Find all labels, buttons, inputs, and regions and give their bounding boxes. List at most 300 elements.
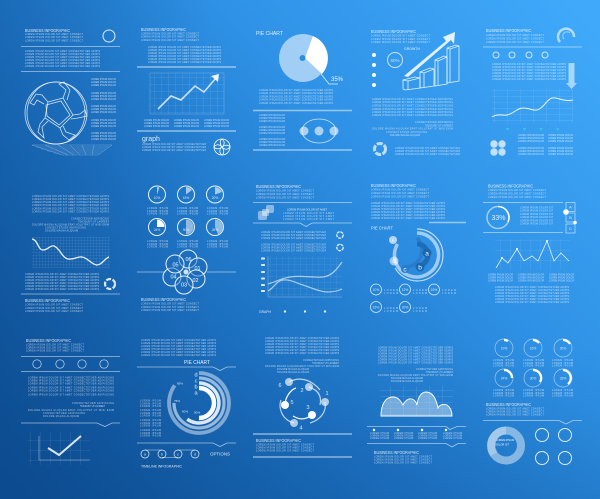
side notes: LOREM IPSUM DOLOR xyxy=(91,99,116,101)
side notes: LOREM IPSUM xyxy=(140,423,161,425)
ring row xyxy=(33,360,108,368)
chart captions: LOREM IPSUM DOLOR xyxy=(488,280,513,282)
body text: LOREM IPSUM DOLOR SIT AMET CONSECTETUER ADIPIS xyxy=(141,354,216,357)
intro text: LOREM IPSUM DOLOR SIT AMET CONSECT xyxy=(488,196,547,199)
body text: TINCIDUNT UT LAOREET xyxy=(312,362,340,365)
body text: LOREM IPSUM DOLOR SIT AMET CONSECTETUER ADIPIS xyxy=(492,72,566,75)
label: growth: GROWTH xyxy=(404,47,421,51)
body text: CONSECTETUER ADIPISCING xyxy=(72,402,114,405)
footer text: LOREM IPSUM DOLOR SIT AMET CONSECT xyxy=(25,310,84,313)
captions: LOREM IPSUM DOLOR xyxy=(518,154,544,156)
body text: LOREM IPSUM DOLOR SIT AMET CONSECTETUER ADIPIS xyxy=(492,66,566,69)
icon: segmented globe xyxy=(25,82,87,144)
body text: LOREM IPSUM DOLOR SIT AMET CONSECTETUER ADIPIS xyxy=(25,50,100,53)
caption columns xyxy=(144,120,229,128)
body text: LOREM IPSUM DOLOR SIT AMET CONSECTETUER xyxy=(261,231,326,234)
side notes: LOREM IPSUM xyxy=(140,430,161,432)
caption columns: LOREM IPSUM DOLOR xyxy=(204,126,229,128)
body text: LOREM IPSUM DOLOR SIT AMET CONSECTETUER ADIPIS xyxy=(371,205,445,208)
timeline captions: LOREM IPSUM xyxy=(370,438,389,440)
gauge captions: LOREM IPSUM xyxy=(523,390,544,392)
icon: clover xyxy=(490,140,506,156)
gauge captions: LOREM xyxy=(384,293,398,295)
petal diagram: 06 xyxy=(185,257,192,263)
side notes: LOREM IPSUM DOLOR xyxy=(91,106,116,108)
lower text: LOREM IPSUM DOLOR SIT AMET CONSECTETUER ADIPIS xyxy=(25,288,99,291)
gauge captions: LOREM IPSUM xyxy=(493,390,514,392)
body text: LOREM IPSUM DOLOR SIT AMET CONSECTETUER xyxy=(261,237,326,240)
body text: LOREM IPSUM DOLOR SIT AMET CONSECTETUER ADIPIS xyxy=(378,356,453,358)
heading: pie chart: PIE CHART xyxy=(184,360,211,366)
panel: swirl cycle xyxy=(253,337,352,457)
intro text: LOREM IPSUM DOLOR SIT AMET CONSECT xyxy=(141,32,200,36)
swirl diagram: 4 xyxy=(299,426,303,432)
footnote text xyxy=(395,147,460,156)
panel: pie chart 35% xyxy=(253,31,352,150)
intro text: LOREM IPSUM DOLOR SIT AMET CONSECT xyxy=(26,344,85,346)
body text: LOREM IPSUM DOLOR SIT AMET CONSECTETUER ADIPIS xyxy=(495,292,569,295)
side notes: LOREM IPSUM DOLOR xyxy=(259,133,285,135)
chart captions: LOREM IPSUM DOLOR xyxy=(549,280,574,282)
radial chart: c xyxy=(403,266,407,274)
body text: LOREM IPSUM DOLOR SIT AMET CONSECTETUER ADIPIS xyxy=(492,69,566,72)
pie row 1: 15% xyxy=(183,196,189,200)
body text xyxy=(372,98,454,137)
graph text: LOREM IPSUM DOLOR SIT AMET CONSECTETUER xyxy=(142,149,206,152)
curve chart xyxy=(261,256,342,297)
lower text: LOREM IPSUM DOLOR SIT AMET CONSECTETUER ADIPIS xyxy=(25,282,99,285)
body text: LOREM IPSUM DOLOR SIT AMET CONSECTETUER ADIPIS xyxy=(32,195,109,198)
petal diagram: 03 xyxy=(181,282,187,288)
intro text: LOREM IPSUM DOLOR SIT AMET CONSECT xyxy=(486,34,545,37)
gauge captions: LOREM IPSUM xyxy=(523,363,544,365)
mini gauges: 20% xyxy=(402,306,408,310)
body text: LOREM IPSUM DOLOR SIT AMET CONSECTETUER ADIPIS xyxy=(32,210,109,214)
footnote text: LOREM IPSUM DOLOR SIT AMET CONSECTETUER xyxy=(395,153,460,156)
icon: dashed ring xyxy=(105,279,115,289)
heading: BUSINESS INFOGRAPHIC xyxy=(371,183,416,188)
body text: LOREM IPSUM DOLOR SIT AMET CONSECTETUER ADIPIS xyxy=(148,46,221,49)
caption columns: LOREM IPSUM DOLOR xyxy=(174,126,199,128)
panel: radial pie chart xyxy=(370,183,466,313)
pie captions: LOREM IPSUM xyxy=(207,244,228,246)
radial chart: d xyxy=(392,258,396,265)
pie captions: LOREM IPSUM xyxy=(177,241,198,243)
pie captions: LOREM IPSUM xyxy=(147,211,168,213)
body text: LOREM IPSUM DOLOR SIT AMET CONSECTETUER ADIPIS xyxy=(495,298,569,301)
intro text: LOREM IPSUM DOLOR SIT AMET CONSECT xyxy=(486,414,545,416)
callout heading: LOREM IPSUM DOLOR SIT AMET xyxy=(287,208,327,212)
body text: LOREM IPSUM DOLOR SIT AMET CONSECTETUER ADIPISCING xyxy=(28,390,114,392)
intro text: LOREM IPSUM DOLOR SIT AMET CONSECT xyxy=(256,193,315,196)
gauge: 33%: 33% xyxy=(491,215,506,222)
pie captions: LOREM IPSUM xyxy=(177,208,198,210)
intro text: LOREM IPSUM DOLOR SIT AMET CONSECT xyxy=(371,41,431,44)
pie captions: LOREM IPSUM xyxy=(147,208,168,210)
body text xyxy=(259,89,333,105)
line chart with arrow xyxy=(150,73,224,114)
dashed ring icons xyxy=(337,232,343,251)
intro text xyxy=(26,344,85,352)
body text xyxy=(28,376,114,418)
petal diagram: 05 xyxy=(172,262,179,268)
body text xyxy=(148,46,221,64)
pie row 1 xyxy=(148,186,224,203)
side notes: LOREM IPSUM DOLOR xyxy=(91,82,116,84)
pie chart xyxy=(279,34,328,82)
radial chart: a xyxy=(425,250,429,258)
intro text: LOREM IPSUM DOLOR SIT AMET CONSECT xyxy=(256,196,315,200)
panel: check mark chart xyxy=(21,338,120,465)
gauge captions: LOREM IPSUM xyxy=(552,360,573,362)
intro text: LOREM IPSUM DOLOR SIT AMET CONSECT xyxy=(486,38,545,40)
side notes: LOREM IPSUM xyxy=(140,416,161,418)
gauge captions: LOREM xyxy=(384,308,398,310)
body text: LOREM IPSUM DOLOR SIT AMET CONSECTETUER ADIPIS xyxy=(148,55,221,58)
pie row 2: 50% xyxy=(183,228,189,232)
timeline xyxy=(141,450,199,458)
body text: LOREM IPSUM DOLOR SIT AMET CONSECTETUER ADIPIS xyxy=(371,202,445,205)
footer text: LOREM IPSUM DOLOR SIT AMET CONSECT xyxy=(256,446,315,450)
heading: BUSINESS INFOGRAPHIC xyxy=(486,402,531,407)
side notes: LOREM IPSUM xyxy=(140,400,161,402)
gauge captions: LOREM IPSUM xyxy=(523,366,544,368)
side notes: LOREM IPSUM DOLOR xyxy=(259,118,285,120)
timeline captions: LOREM IPSUM xyxy=(394,438,413,440)
body text: CONSECTETUER ADIPISCING xyxy=(303,359,339,362)
timeline: b xyxy=(161,452,163,456)
caption columns: LOREM IPSUM DOLOR xyxy=(144,120,169,122)
pie captions: LOREM IPSUM xyxy=(207,214,228,216)
side notes xyxy=(140,400,161,438)
body text xyxy=(492,63,566,81)
timeline captions: LOREM IPSUM xyxy=(443,436,462,438)
body text xyxy=(25,50,100,68)
swirl diagram xyxy=(278,378,329,432)
gauge text: LOREM IPSUM DOLOR SIT xyxy=(520,224,554,226)
concentric ring chart xyxy=(169,372,229,433)
body text: LOREM IPSUM DOLOR SIT AMET CONSECTETUER ADIPIS xyxy=(25,53,100,56)
check chart xyxy=(28,432,90,465)
graph text: LOREM IPSUM DOLOR SIT AMET CONSECTETUER xyxy=(142,143,206,146)
icon: ring xyxy=(103,30,115,42)
footer text: LOREM IPSUM DOLOR SIT AMET CONSECT xyxy=(374,456,433,458)
concentric ring chart: a xyxy=(194,390,198,396)
side notes: LOREM IPSUM DOLOR xyxy=(91,139,116,141)
body text: DOLORE MAGNA ALIQUAM ERAT VOLUTPAT UT WISI ENIM xyxy=(378,374,453,377)
body text: LOREM IPSUM DOLOR SIT AMET CONSECTETUER ADIPISCING xyxy=(372,101,453,104)
body text: CONSECTETUER ADIPISCING xyxy=(45,226,86,230)
callout text xyxy=(283,212,335,221)
gauge text: LOREM IPSUM DOLOR SIT xyxy=(520,210,554,212)
callout: 35%: 35% xyxy=(331,77,344,83)
pie captions: LOREM IPSUM xyxy=(177,214,198,216)
icon: gauge xyxy=(558,29,574,42)
intro text: LOREM IPSUM DOLOR SIT AMET CONSECT xyxy=(371,34,431,38)
body text: DOLORE MAGNA ALIQUAM xyxy=(277,368,309,371)
small ring icons xyxy=(493,52,548,58)
pie captions: LOREM IPSUM xyxy=(147,214,168,216)
body text: CONSECTETUER ADIPISCING xyxy=(71,218,109,220)
mini gauges: 16% xyxy=(373,306,379,310)
icon: linked circles xyxy=(300,119,338,143)
body text: LOREM IPSUM DOLOR SIT AMET CONSECTETUER ADIPIS xyxy=(259,98,333,102)
chart captions: LOREM IPSUM DOLOR xyxy=(518,280,544,282)
body text: LOREM IPSUM DOLOR SIT AMET CONSECTETUER ADIPIS xyxy=(148,52,221,55)
body text: LOREM IPSUM DOLOR SIT AMET CONSECTETUER ADIPIS xyxy=(148,61,221,64)
chart captions: LOREM IPSUM DOLOR xyxy=(549,274,574,276)
donut chart xyxy=(491,430,521,460)
icon: rounded squares xyxy=(258,205,274,220)
timeline: c xyxy=(177,452,179,456)
chart captions: LOREM IPSUM DOLOR xyxy=(549,278,574,280)
timeline dots xyxy=(373,429,447,431)
body text xyxy=(265,337,340,374)
gauge captions: LOREM IPSUM xyxy=(523,360,544,362)
gauge grid: 10% xyxy=(501,346,507,350)
side notes: LOREM IPSUM DOLOR xyxy=(91,93,116,95)
gauge captions: LOREM xyxy=(413,308,427,310)
gauge text: LOREM IPSUM DOLOR SIT xyxy=(520,220,554,222)
body text: LOREM IPSUM DOLOR SIT AMET CONSECTETUER ADIPIS xyxy=(141,348,216,351)
footer text: LOREM IPSUM DOLOR SIT AMET CONSECT xyxy=(141,309,200,312)
body text: TINCIDUNT UT LAOREET xyxy=(425,124,454,128)
body text: LOREM IPSUM DOLOR SIT AMET CONSECTETUER ADIPISCING xyxy=(28,386,114,390)
gauge captions: LOREM IPSUM xyxy=(552,393,573,395)
pie captions: LOREM IPSUM xyxy=(147,244,168,246)
caption columns: LOREM IPSUM DOLOR xyxy=(174,120,199,122)
side notes: LOREM IPSUM DOLOR xyxy=(91,120,116,122)
radial chart xyxy=(389,229,443,281)
body text: TINCIDUNT UT LAOREET xyxy=(80,405,106,408)
gauge captions: LOREM IPSUM xyxy=(493,396,514,398)
intro text xyxy=(488,189,547,199)
body text: LOREM IPSUM DOLOR SIT AMET CONSECTETUER ADIPIS xyxy=(495,289,569,292)
body text xyxy=(261,231,326,252)
side notes: LOREM IPSUM DOLOR xyxy=(91,79,116,81)
panel: growth line graph xyxy=(137,27,236,155)
footer text: LOREM IPSUM DOLOR SIT AMET CONSECT xyxy=(25,307,84,310)
panel: wave chart top right xyxy=(483,28,582,156)
body text: DOLORE MAGNA ALIQUAM ERAT VOLUTPAT UT WISI ENIM xyxy=(32,224,109,226)
timeline captions: LOREM IPSUM xyxy=(418,438,437,440)
body text: LOREM IPSUM DOLOR SIT AMET CONSECTETUER ADIPIS xyxy=(141,351,216,354)
captions: LOREM IPSUM DOLOR xyxy=(518,138,544,140)
body text: LOREM IPSUM DOLOR SIT AMET CONSECTETUER ADIPIS xyxy=(259,96,333,98)
gauge captions: LOREM IPSUM xyxy=(552,396,573,398)
body text: LOREM IPSUM DOLOR SIT AMET CONSECTETUER ADIPIS xyxy=(495,286,569,289)
side notes: LOREM IPSUM xyxy=(140,413,161,415)
gauge captions: LOREM IPSUM xyxy=(523,396,544,398)
caption columns: LOREM IPSUM DOLOR xyxy=(204,120,229,122)
body text: DOLORE MAGNA ALIQUAM xyxy=(45,230,78,232)
side notes: LOREM IPSUM DOLOR xyxy=(91,109,116,111)
captions: LOREM IPSUM DOLOR xyxy=(548,138,573,140)
intro text xyxy=(371,34,431,44)
concentric ring chart: 75% xyxy=(174,399,180,403)
body text: DOLORE MAGNA ALIQUAM ERAT VOLUTPAT UT WISI ENIM xyxy=(28,409,114,412)
concentric ring chart: 60% xyxy=(182,410,188,414)
mini gauges xyxy=(370,284,440,312)
intro text: LOREM IPSUM DOLOR SIT AMET CONSECT xyxy=(371,192,430,195)
captions: LOREM IPSUM DOLOR xyxy=(548,151,573,153)
timeline captions: LOREM IPSUM xyxy=(394,436,413,438)
body text: LOREM IPSUM DOLOR SIT AMET CONSECTETUER ADIPIS xyxy=(259,102,333,105)
timeline captions: LOREM IPSUM xyxy=(370,433,389,435)
side notes: LOREM IPSUM DOLOR xyxy=(91,85,116,87)
gauge captions: LOREM xyxy=(384,290,398,292)
gauge captions: LOREM IPSUM xyxy=(493,363,514,365)
heading: BUSINESS INFOGRAPHIC xyxy=(486,28,531,33)
heading: BUSINESS INFOGRAPHIC xyxy=(256,438,301,443)
body text xyxy=(378,346,454,383)
gauge captions: LOREM xyxy=(442,293,456,295)
mini gauges: 15% xyxy=(431,288,437,292)
body text: LOREM IPSUM DOLOR SIT AMET CONSECTETUER ADIPIS xyxy=(371,211,445,214)
side notes: LOREM IPSUM xyxy=(140,426,161,428)
body text: LOREM IPSUM DOLOR SIT AMET CONSECTETUER ADIPISCING xyxy=(372,98,453,101)
panel: growth bars xyxy=(371,29,460,156)
lower text: LOREM IPSUM DOLOR SIT AMET CONSECTETUER ADIPIS xyxy=(25,276,99,279)
side notes: LOREM IPSUM DOLOR xyxy=(91,123,116,125)
callout text: LOREM IPSUM DOLOR SIT AMET xyxy=(283,218,335,221)
footnote text: LOREM IPSUM DOLOR SIT AMET CONSECTETUER xyxy=(395,150,460,153)
body text: DOLORE MAGNA ALIQUAM xyxy=(391,377,423,380)
side notes: LOREM IPSUM DOLOR xyxy=(259,115,285,117)
body text: LOREM IPSUM DOLOR SIT AMET CONSECTETUER ADIPIS xyxy=(141,342,216,345)
lower text xyxy=(25,273,99,291)
heading: graph: graph xyxy=(142,136,160,143)
intro text: LOREM IPSUM DOLOR SIT AMET CONSECT xyxy=(26,346,85,350)
footer text: LOREM IPSUM DOLOR SIT AMET CONSECT xyxy=(141,306,200,309)
pie row 2: 35% xyxy=(212,228,218,232)
heading: BUSINESS INFOGRAPHIC xyxy=(256,184,301,189)
radial chart: b xyxy=(418,264,422,272)
gauge captions: LOREM IPSUM xyxy=(493,366,514,368)
gauge grid xyxy=(495,339,572,387)
intro text: LOREM IPSUM DOLOR SIT AMET CONSECT xyxy=(256,190,315,192)
body text: LOREM IPSUM DOLOR SIT AMET CONSECTETUER ADIPIS xyxy=(495,301,569,304)
body text: LOREM IPSUM DOLOR SIT AMET CONSECTETUER ADIPIS xyxy=(495,295,569,298)
body text: LOREM IPSUM DOLOR SIT AMET CONSECTETUER ADIPISCING xyxy=(372,114,453,117)
chart captions: LOREM IPSUM DOLOR xyxy=(488,274,513,276)
gauge grid: 33% xyxy=(560,376,566,380)
pie row 2 xyxy=(148,218,224,236)
pie captions: LOREM IPSUM xyxy=(207,241,228,243)
icon: dashed disc xyxy=(374,144,386,154)
intro text: LOREM IPSUM DOLOR SIT AMET CONSECT xyxy=(488,192,547,196)
side notes: LOREM IPSUM xyxy=(140,436,161,438)
body text: LOREM IPSUM DOLOR SIT AMET CONSECTETUER ADIPISCING xyxy=(28,376,114,380)
captions: LOREM IPSUM DOLOR xyxy=(548,154,573,156)
captions: LOREM IPSUM DOLOR xyxy=(548,135,573,137)
swirl diagram: 6 xyxy=(278,383,282,389)
gauge captions xyxy=(384,290,456,313)
side notes xyxy=(91,79,116,141)
intro text: LOREM IPSUM DOLOR SIT AMET CONSECT xyxy=(371,38,431,41)
body text: LOREM IPSUM DOLOR SIT AMET CONSECTETUER ADIPISCING xyxy=(372,104,453,108)
pie captions: LOREM IPSUM xyxy=(147,246,168,248)
captions xyxy=(518,135,573,156)
chart captions: LOREM IPSUM DOLOR xyxy=(518,274,544,276)
footer text xyxy=(141,302,200,312)
body text: LOREM IPSUM DOLOR SIT AMET CONSECTETUER ADIPIS xyxy=(378,352,453,356)
label: graph: GRAPH xyxy=(259,310,272,314)
body text: LOREM IPSUM DOLOR SIT AMET CONSECTETUER ADIPIS xyxy=(378,362,453,364)
captions: LOREM IPSUM DOLOR xyxy=(518,148,544,150)
graph text xyxy=(142,143,206,152)
side notes: LOREM IPSUM xyxy=(140,433,161,435)
footer text: LOREM IPSUM DOLOR SIT AMET CONSECT xyxy=(256,450,315,452)
body text: LOREM IPSUM DOLOR SIT AMET CONSECTETUER ADIPIS xyxy=(148,58,221,61)
side notes: LOREM IPSUM DOLOR xyxy=(259,145,285,147)
gauge: 60%: 60% xyxy=(390,58,400,63)
timeline: a xyxy=(144,452,146,456)
pie captions xyxy=(147,208,228,248)
body text: LOREM IPSUM DOLOR SIT AMET CONSECTETUER ADIPIS xyxy=(371,208,445,211)
body text: CONSECTETUER ADIPISCING xyxy=(43,412,85,415)
body text: LOREM IPSUM DOLOR SIT AMET CONSECTETUER ADIPIS xyxy=(265,343,339,346)
gauge text: LOREM IPSUM DOLOR SIT xyxy=(520,214,554,216)
pie captions: LOREM IPSUM xyxy=(207,208,228,210)
concentric ring chart: c xyxy=(195,378,198,384)
option boxes: C xyxy=(569,226,572,231)
body text: LOREM IPSUM DOLOR SIT AMET CONSECTETUER ADIPIS xyxy=(25,56,100,59)
heading: BUSINESS INFOGRAPHIC xyxy=(371,29,416,34)
captions: LOREM IPSUM DOLOR xyxy=(518,141,544,143)
concentric ring chart: d xyxy=(194,372,198,378)
body text xyxy=(495,286,569,304)
gauge captions: LOREM IPSUM xyxy=(552,363,573,365)
intro text xyxy=(486,34,545,44)
caption columns: LOREM IPSUM DOLOR xyxy=(174,123,199,125)
gauge captions: LOREM xyxy=(442,290,456,292)
body text: LOREM IPSUM DOLOR SIT AMET CONSECTETUER ADIPISCING xyxy=(28,394,114,396)
body text: LOREM IPSUM DOLOR SIT AMET CONSECTETUER xyxy=(261,234,326,237)
heading: business infographic: BUSINESS INFOGRAPHIC xyxy=(25,28,70,33)
caption columns: LOREM IPSUM DOLOR xyxy=(144,123,169,125)
lower text: LOREM IPSUM DOLOR SIT AMET CONSECTETUER ADIPIS xyxy=(25,279,99,282)
side notes: LOREM IPSUM xyxy=(140,420,161,422)
timeline captions: LOREM IPSUM xyxy=(443,433,462,435)
body text: LOREM IPSUM DOLOR SIT AMET CONSECTETUER ADIPIS xyxy=(32,204,109,207)
gauge captions: LOREM xyxy=(413,293,427,295)
heading: BUSINESS INFOGRAPHIC xyxy=(25,298,70,303)
arrow: down xyxy=(566,63,577,89)
area chart xyxy=(380,386,453,416)
callout text: LOREM IPSUM DOLOR SIT AMET xyxy=(283,215,335,218)
body text: LOREM IPSUM DOLOR SIT AMET CONSECTETUER xyxy=(261,250,326,252)
intro text: LOREM IPSUM DOLOR SIT AMET CONSECT xyxy=(371,196,430,198)
body text: LOREM IPSUM DOLOR SIT AMET CONSECTETUER ADIPIS xyxy=(32,198,109,201)
markers xyxy=(506,128,560,131)
body text: LOREM IPSUM DOLOR SIT AMET CONSECTETUER ADIPIS xyxy=(259,92,333,95)
radial chart: e xyxy=(392,238,395,242)
petal diagram: 01 xyxy=(194,266,201,272)
heading: BUSINESS INFOGRAPHIC xyxy=(141,27,186,32)
body text: LOREM IPSUM DOLOR SIT AMET CONSECTETUER ADIPISCING xyxy=(372,111,453,114)
body text: LOREM IPSUM DOLOR SIT AMET CONSECTETUER ADIPIS xyxy=(265,340,339,343)
donut chart: DOLOR SIT xyxy=(495,442,509,446)
timeline captions xyxy=(370,433,462,440)
body text: DOLORE MAGNA ALIQUAM ERAT VOLUTPAT UT WISI ENIM xyxy=(265,365,339,368)
body text: LOREM IPSUM DOLOR SIT AMET CONSECTETUER ADIPIS xyxy=(378,350,453,352)
caption columns: LOREM IPSUM DOLOR xyxy=(144,126,169,128)
petal diagram: 04 xyxy=(170,274,177,280)
ring icons xyxy=(536,428,572,464)
option boxes xyxy=(563,202,577,233)
label: options: OPTIONS xyxy=(210,452,230,456)
